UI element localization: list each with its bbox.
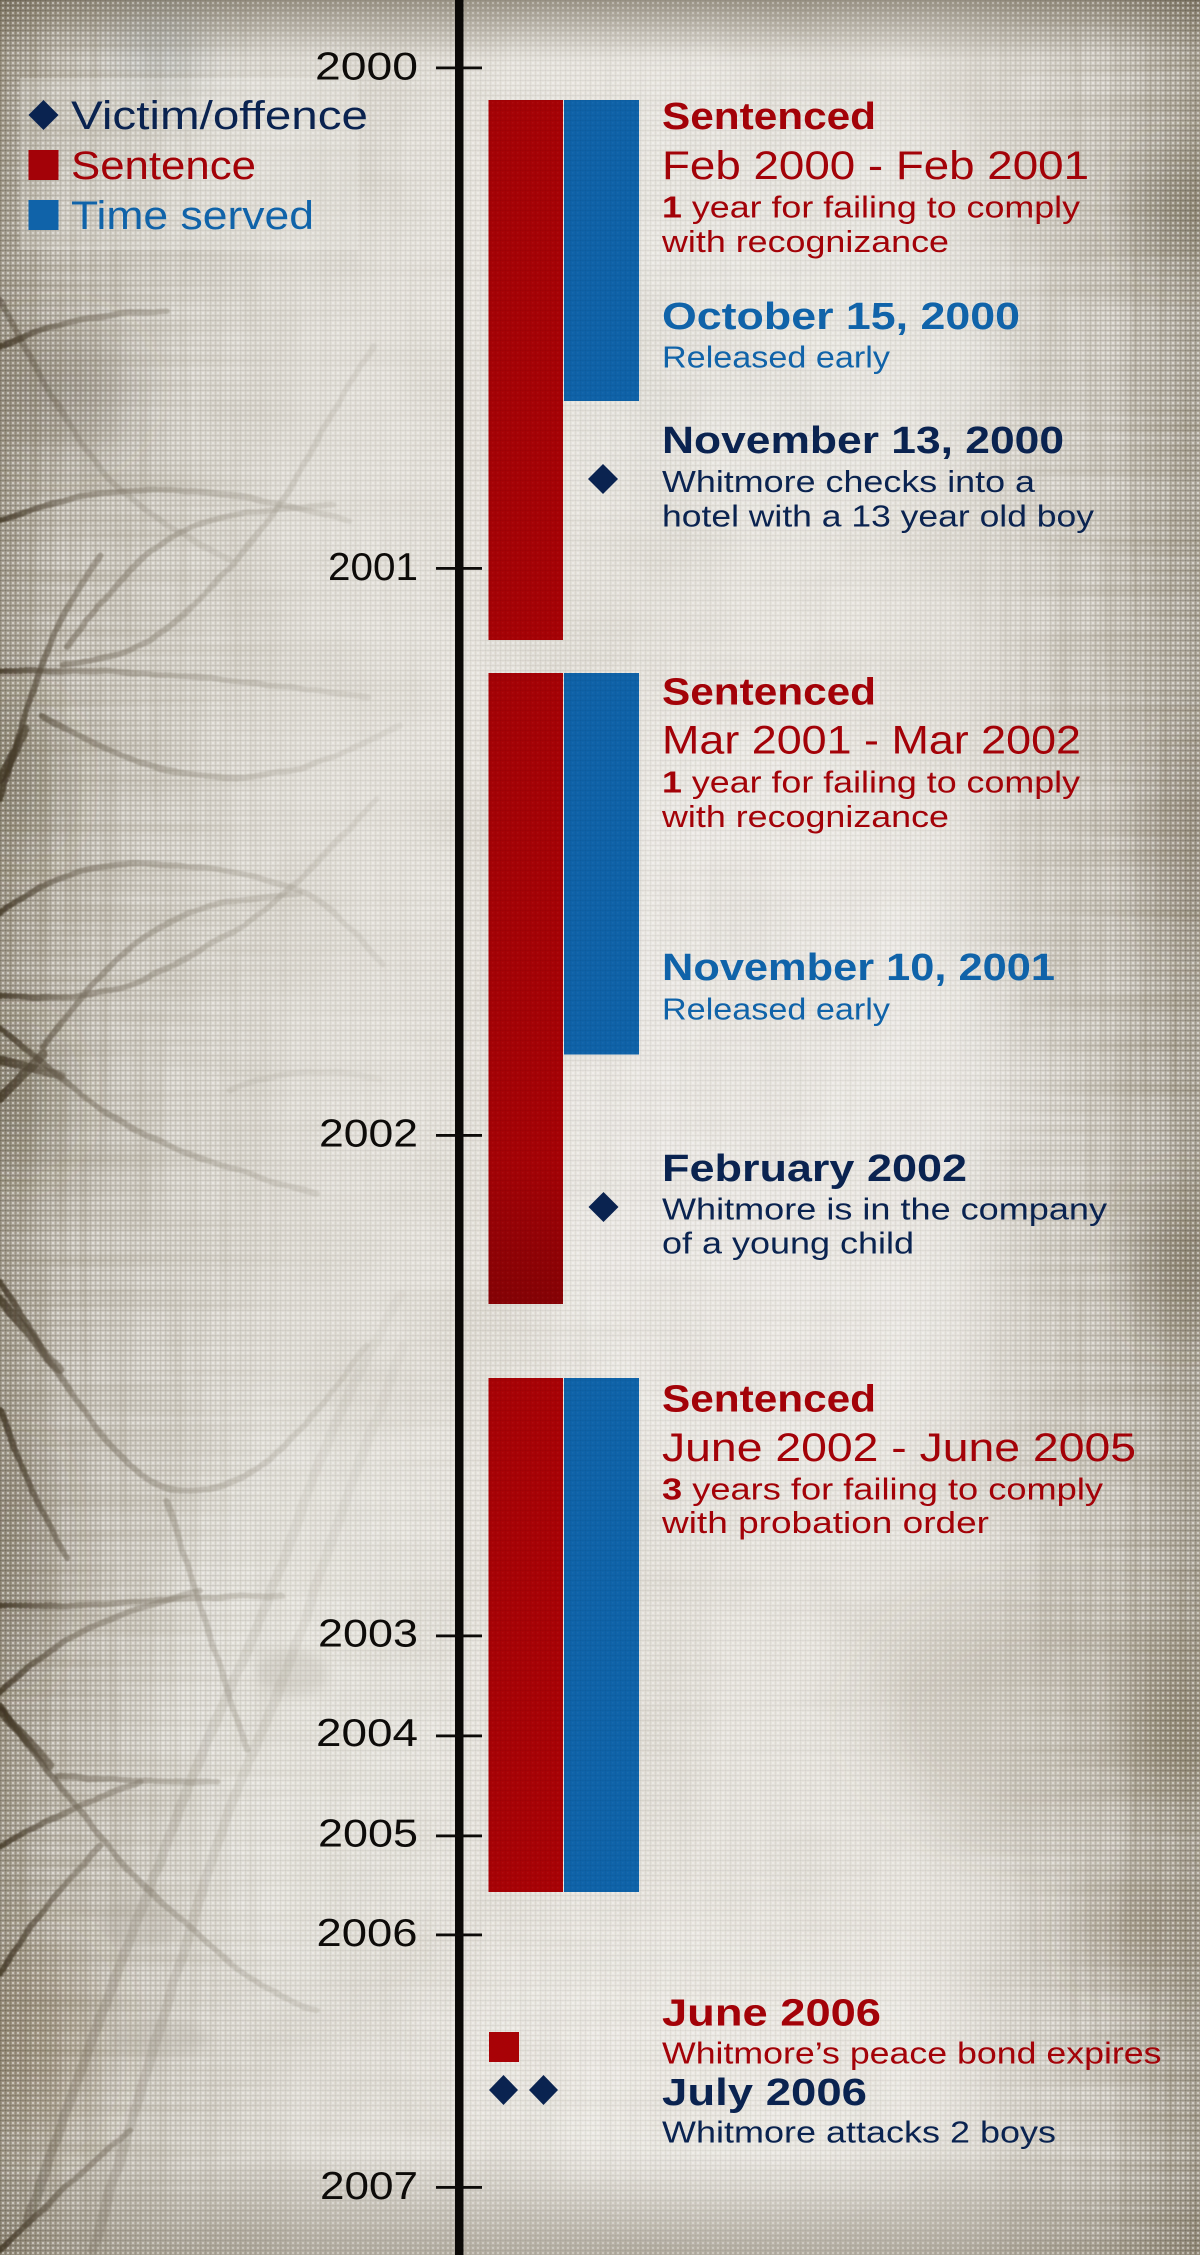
text block: July 2006: July 2006 — [662, 2072, 867, 2114]
text block: June 2006: Whitmore’s peace bond expires — [662, 2036, 1162, 2070]
text block: November 13, 2000 offence — [662, 420, 1095, 534]
year 2007: 2007 — [320, 2165, 418, 2208]
text block: June 2006: June 2006 — [662, 1992, 881, 2034]
year 2003: 2003 — [318, 1612, 418, 1656]
text block: February 2002 offence: February 2002 — [662, 1148, 967, 1190]
year 2004: 2004 — [316, 1712, 418, 1755]
text block: November 13, 2000 offence: Whitmore checks into a — [662, 464, 1036, 499]
text block: second release — [662, 947, 1055, 1026]
icon: two attack diamonds — [489, 2075, 558, 2105]
text block: second sentence: with recognizance — [661, 799, 949, 834]
text block: July 2006 — [662, 2072, 1056, 2150]
icon: peace bond square — [489, 2032, 519, 2062]
legend: sentence: Sentence — [71, 144, 256, 188]
scribbled ink strokes — [0, 300, 403, 2250]
text block: third sentence: Sentenced — [662, 1378, 876, 1420]
text block: first release: Released early — [662, 340, 891, 374]
text block: November 13, 2000 offence: November 13, 2000 — [662, 420, 1064, 462]
icon: offence diamond February 2002 — [588, 1192, 618, 1222]
text block: second sentence: Mar 2001 - Mar 2002 — [662, 718, 1081, 762]
text block: second release: November 10, 2001 — [662, 947, 1055, 989]
sentence bar 2001-2002 — [488, 673, 639, 1304]
bar weave overlay — [488, 100, 639, 1892]
year 2000: 2000 — [315, 46, 418, 88]
text block: first sentence: with recognizance — [661, 224, 949, 259]
text block: third sentence — [661, 1378, 1136, 1540]
text block: July 2006: Whitmore attacks 2 boys — [662, 2114, 1056, 2150]
timeline axis — [455, 0, 464, 2255]
text block: second sentence: Sentenced — [662, 672, 876, 714]
text block: third sentence: with probation order — [661, 1505, 989, 1540]
text block: February 2002 offence: of a young child — [662, 1226, 914, 1260]
year 2001: 2001 — [328, 546, 418, 589]
text block: second release: Released early — [662, 992, 891, 1026]
text block: first release — [662, 296, 1020, 374]
text block: first sentence: Sentenced — [662, 96, 876, 138]
text block: first sentence: Feb 2000 - Feb 2001 — [662, 144, 1089, 188]
text block: second sentence — [661, 672, 1081, 834]
legend: victim/offence: Victim/offence — [71, 94, 368, 138]
text block: November 13, 2000 offence: hotel with a 13 year old boy — [662, 498, 1095, 534]
text block: February 2002 offence: Whitmore is in the company — [662, 1192, 1108, 1226]
text block: second sentence: 1 year for failing to comply — [662, 764, 1081, 800]
text block: June 2006 — [662, 1992, 1162, 2070]
sentence bar 2000-2001 — [488, 100, 639, 640]
text block: third sentence: 3 years for failing to comply — [662, 1472, 1104, 1506]
year 2002: 2002 — [319, 1112, 418, 1156]
year 2006: 2006 — [316, 1912, 418, 1955]
text block: first release: October 15, 2000 — [662, 296, 1020, 338]
text block: first sentence — [661, 96, 1089, 259]
year 2005: 2005 — [318, 1812, 418, 1856]
year ticks and labels — [315, 46, 482, 2208]
legend: time served: Time served — [71, 194, 314, 238]
icon: offence diamond November 2000 — [588, 464, 618, 494]
legend — [28, 94, 368, 238]
text block: February 2002 offence — [662, 1148, 1108, 1260]
sentence bar 2002-2005 — [488, 1378, 639, 1892]
text block: third sentence: June 2002 - June 2005 — [662, 1426, 1136, 1470]
lighter patch behind legend — [20, 78, 358, 250]
text block: first sentence: 1 year for failing to comply — [662, 190, 1081, 224]
